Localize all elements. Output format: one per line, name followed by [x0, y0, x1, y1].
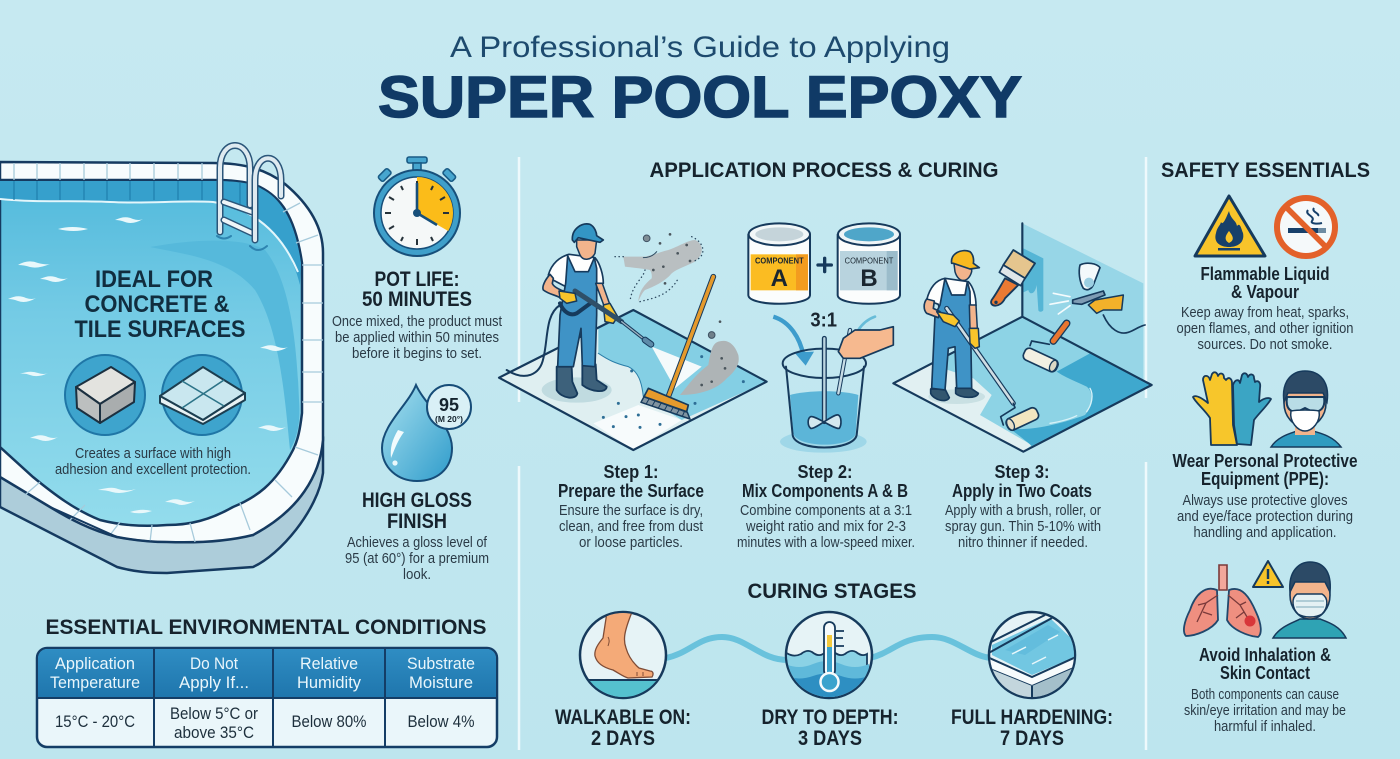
water ripples: [8, 217, 288, 513]
text: step 2: [737, 462, 915, 551]
text: step 2: minutes with a low-speed mixer.: [737, 534, 915, 551]
icon: can component A: [748, 223, 810, 304]
worker with roller: [931, 388, 978, 401]
table: Below 5°C or: [170, 705, 258, 723]
text: step 2: weight ratio and mix for 2-3: [745, 518, 906, 535]
text: step 1: [558, 462, 704, 551]
heading: curing stages: CURING STAGES: [748, 580, 916, 603]
panel: high gloss finish: [345, 385, 489, 583]
icon: lungs: [1184, 565, 1261, 637]
icon: can component A: COMPONENT: [755, 255, 804, 265]
dust cloud upper: [623, 240, 702, 302]
illustration: step 2 mixing components: [748, 223, 900, 453]
icon: foot circle: [578, 612, 668, 700]
pool water: [0, 180, 302, 526]
text: pot life: be applied within 50 minutes: [335, 329, 499, 346]
icon: no smoking: [1277, 198, 1335, 256]
text: flammable: & Vapour: [1231, 282, 1299, 302]
text: pot life: POT LIFE:: [374, 268, 460, 291]
label: dry to depth: 3 DAYS: [798, 727, 862, 750]
text: flammable: sources. Do not smoke.: [1198, 336, 1332, 353]
table: Humidity: [297, 673, 361, 692]
worker body: [557, 364, 607, 398]
text: step 3: Apply with a brush, roller, or: [945, 502, 1101, 519]
text: step 1: Prepare the Surface: [558, 481, 704, 501]
illustration: step 1 preparing the surface: [499, 224, 767, 450]
text: high gloss: 95 (at 60°) for a premium: [345, 550, 489, 567]
text: step 3: Step 3:: [994, 462, 1050, 482]
panel: safety essentials: [1161, 159, 1370, 735]
text: step 1: Step 1:: [604, 462, 658, 482]
icon: person with goggles: [1271, 371, 1341, 447]
text: high gloss: Achieves a gloss level of: [347, 534, 488, 551]
broom: [668, 277, 713, 397]
ratio label: 3:1: [810, 309, 837, 332]
label: walkable on: 2 DAYS: [591, 727, 655, 750]
text: surface description: [55, 445, 251, 478]
table: Temperature: [50, 673, 140, 692]
text: high gloss: [345, 489, 489, 583]
table: Do Not: [190, 654, 238, 673]
icon: water drop with badge: (M 20°): [435, 414, 463, 424]
text: ppe: and eye/face protection during: [1177, 508, 1353, 525]
text: step 2: Mix Components A & B: [742, 481, 908, 501]
floor debris: [603, 357, 743, 427]
text: flammable: Flammable Liquid: [1200, 264, 1330, 284]
table: Below 4%: [408, 713, 475, 731]
icon: person with mask: [1273, 562, 1346, 638]
label: full hardening: FULL HARDENING:: [951, 706, 1113, 729]
panel: essential environmental conditions: [37, 616, 497, 747]
pressure washer: [560, 302, 592, 314]
text: inhalation: skin/eye irritation and may be: [1184, 702, 1346, 719]
icon: stopwatch: [374, 157, 460, 256]
pool coping: [0, 162, 323, 542]
panel: pool illustration: [0, 146, 323, 573]
table: 15°C - 20°C: [55, 713, 135, 731]
pool wall tiles band: [0, 181, 301, 285]
text: high gloss: FINISH: [387, 510, 447, 533]
icon: paint brush: [991, 250, 1035, 306]
table: Below 80%: [292, 713, 367, 731]
text: step 3: [945, 462, 1101, 551]
label: dry to depth: [762, 706, 898, 750]
roller on floor: [1001, 403, 1015, 425]
heading: ideal for concrete and tile: IDEAL FOR: [95, 266, 213, 293]
pool ladder: [217, 146, 281, 250]
table: above 35°C: [174, 724, 254, 742]
panel: pot life: [332, 157, 503, 362]
text: pot life: 50 MINUTES: [362, 288, 472, 311]
text: pot life: [332, 268, 503, 362]
text: surface description: adhesion and excellent protection.: [55, 461, 251, 478]
text: ppe: Equipment (PPE):: [1201, 469, 1329, 489]
heading: environmental conditions: ESSENTIAL ENVIRONMENTAL CONDITIONS: [46, 616, 486, 639]
text: ppe: Always use protective gloves: [1182, 492, 1348, 509]
icon: can component B: B: [860, 265, 878, 292]
heading: safety essentials: SAFETY ESSENTIALS: [1161, 159, 1370, 182]
text: inhalation: Skin Contact: [1220, 663, 1310, 683]
label: full hardening: 7 DAYS: [1000, 727, 1064, 750]
arrow: pour B: [858, 317, 875, 330]
icon: gloves: [1193, 372, 1271, 445]
icon: thermometer circle: [785, 612, 872, 700]
title: A Professional’s Guide to Applying: [450, 31, 950, 64]
text: ppe: [1172, 451, 1358, 541]
icon: water drop with badge: [382, 385, 471, 481]
title: [378, 31, 1022, 130]
beaker: [780, 327, 893, 453]
label: dry to depth: DRY TO DEPTH:: [762, 706, 898, 729]
text: surface description: Creates a surface with high: [75, 445, 231, 462]
text: step 1: clean, and free from dust: [559, 518, 704, 535]
icon: tile: [160, 355, 245, 435]
icon: can component B: COMPONENT: [845, 255, 893, 265]
table: Substrate: [407, 654, 475, 673]
illustration: step 3 applying coats: [893, 223, 1152, 452]
label: walkable on: WALKABLE ON:: [555, 706, 691, 729]
text: high gloss: look.: [403, 566, 431, 583]
text: step 2: Step 2:: [798, 462, 852, 482]
text: inhalation: harmful if inhaled.: [1214, 718, 1316, 735]
pressure hose: [507, 305, 560, 376]
text: step 1: Ensure the surface is dry,: [559, 502, 703, 519]
icon: flammable warning triangle: [1195, 196, 1265, 256]
text: step 3: spray gun. Thin 5-10% with: [945, 518, 1101, 535]
text: pot life: before it begins to set.: [352, 345, 482, 362]
text: flammable: open flames, and other ignition: [1176, 320, 1354, 337]
icon: paint roller: [1022, 323, 1067, 373]
text: step 1: or loose particles.: [579, 534, 683, 551]
heading: ideal for concrete and tile: [74, 266, 246, 343]
panel: application process and curing: [499, 159, 1152, 750]
table: Apply If...: [179, 673, 249, 692]
label: walkable on: [555, 706, 691, 750]
dust cloud lower: [680, 341, 739, 395]
pool outer wall: [0, 440, 323, 573]
text: inhalation: Avoid Inhalation &: [1199, 645, 1331, 665]
icon: water drop with badge: 95: [439, 395, 459, 415]
text: flammable: [1176, 264, 1354, 353]
icon: can component B: [838, 223, 900, 304]
icon: can component A: A: [771, 265, 788, 292]
text: high gloss: HIGH GLOSS: [362, 489, 472, 512]
heading: ideal for concrete and tile: CONCRETE &: [84, 291, 230, 318]
icon: plus: [818, 258, 831, 272]
table: [37, 648, 497, 747]
heading: ideal for concrete and tile: TILE SURFACES: [74, 316, 246, 343]
icon: concrete block: [65, 355, 145, 435]
label: full hardening: [951, 706, 1113, 750]
title: SUPER POOL EPOXY: [378, 65, 1022, 130]
text: flammable: Keep away from heat, sparks,: [1181, 304, 1349, 321]
text: step 2: Combine components at a 3:1: [740, 502, 912, 519]
text: inhalation: Both components can cause: [1191, 686, 1339, 703]
text: inhalation: [1184, 645, 1346, 735]
table: Relative: [300, 654, 358, 673]
text: ppe: Wear Personal Protective: [1172, 451, 1358, 471]
icon: warning triangle: [1253, 561, 1283, 587]
text: ppe: handling and application.: [1194, 524, 1336, 541]
arrow: pour A: [773, 317, 803, 355]
text: step 3: Apply in Two Coats: [952, 481, 1092, 501]
text: step 3: nitro thinner if needed.: [958, 534, 1088, 551]
table: Application: [55, 654, 135, 673]
heading: application process: APPLICATION PROCESS & CURING: [650, 159, 998, 182]
icon: spray gun: [1050, 263, 1145, 333]
wave connector: [666, 637, 991, 660]
text: pot life: Once mixed, the product must: [332, 313, 503, 330]
table: Moisture: [409, 673, 473, 692]
icon: hardened coating circle: [985, 612, 1076, 700]
